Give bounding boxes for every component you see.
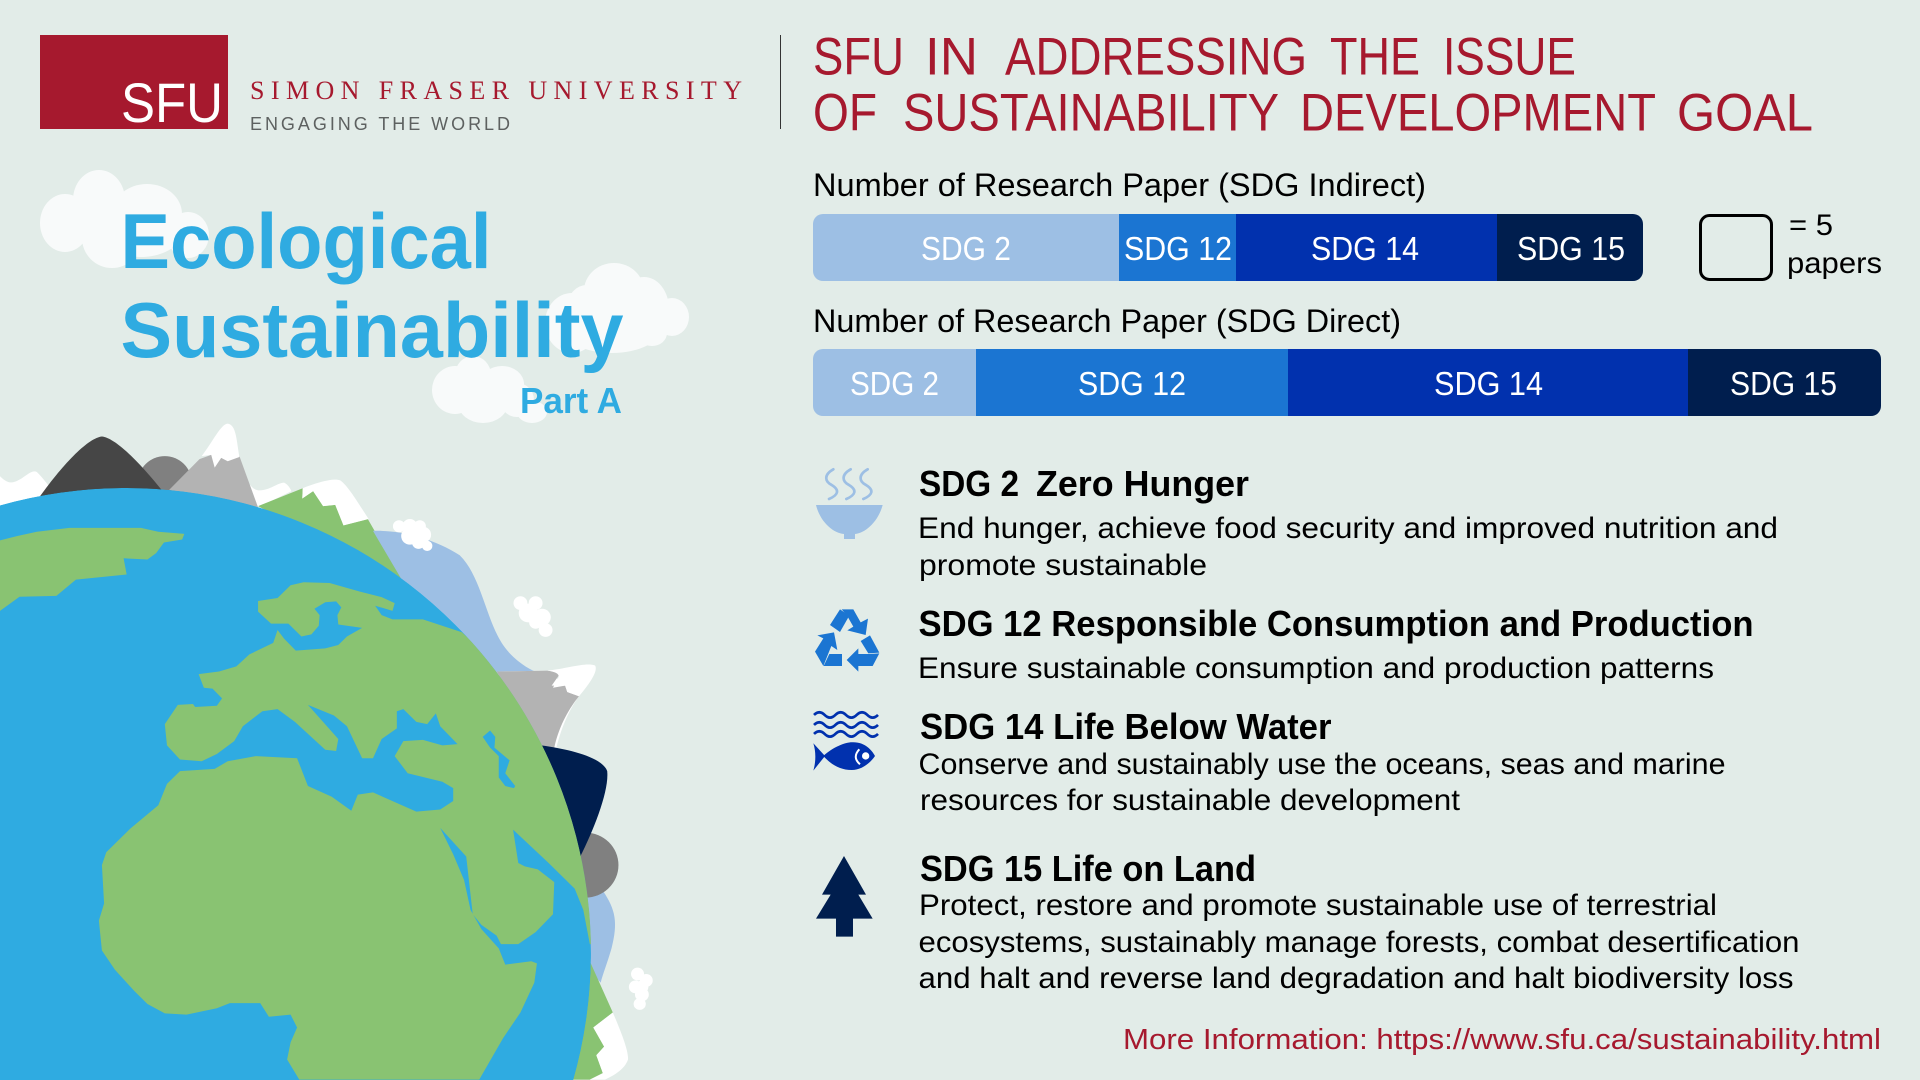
stacked bar: SDG direct: SDG 12 — [1078, 365, 1186, 402]
SDG 2 text: Zero Hunger — [1036, 463, 1249, 504]
heading: SFU in addressing the issue: SFU — [813, 28, 904, 86]
logo: SFU: SFU — [121, 71, 223, 134]
SDG 15 text: ecosystems, sustainably manage forests, combat desertification — [918, 926, 1800, 959]
heading: SFU in addressing the issue: THE — [1330, 28, 1420, 86]
footer: more information link: More Information: https://www.sfu.ca/sustainability.html — [1123, 1024, 1881, 1056]
logo: SFU — [40, 35, 742, 134]
decorative clouds behind title — [40, 170, 689, 423]
legend: box equals 5 papers: papers — [1787, 247, 1882, 280]
SDG 15 text — [918, 848, 1800, 995]
heading: SFU in addressing the issue: DEVELOPMENT — [1300, 84, 1656, 142]
heading: SFU in addressing the issue: ISSUE — [1443, 28, 1576, 86]
icon: recycling arrows — [815, 609, 879, 672]
stacked bar: SDG direct: SDG 14 — [1434, 365, 1543, 402]
heading: SFU in addressing the issue: OF — [813, 84, 877, 142]
heading: SFU in addressing the issue: IN — [925, 28, 978, 86]
stacked bar: SDG indirect: SDG 12 — [1124, 230, 1232, 267]
heading: SFU in addressing the issue: SUSTAINABILITY — [903, 84, 1279, 142]
SDG 2 text: promote sustainable — [919, 549, 1207, 582]
icon: pine tree — [816, 856, 873, 937]
illustration: earth globe — [0, 488, 607, 1080]
heading: SFU in addressing the issue: GOAL — [1677, 84, 1813, 142]
title: Ecological Sustainability Part A: Sustainability — [120, 286, 624, 374]
stacked bar: SDG direct: SDG 2 — [850, 365, 939, 402]
stacked bar: SDG direct: SDG 15 — [1730, 365, 1837, 402]
logo: SFU: ENGAGING THE WORLD — [250, 114, 510, 134]
chart label: SDG direct: Number of Research Paper (SDG Direct) — [813, 303, 1401, 339]
legend: box equals 5 papers — [1700, 209, 1882, 280]
SDG 2 text: End hunger, achieve food security and improved nutrition and — [918, 512, 1778, 545]
title: Ecological Sustainability Part A: Part A — [520, 380, 622, 421]
title: Ecological Sustainability Part A — [120, 197, 624, 421]
title: Ecological Sustainability Part A: Ecological — [120, 197, 492, 285]
heading: SFU in addressing the issue — [813, 28, 1813, 142]
stacked bar: SDG indirect: SDG 15 — [1517, 230, 1625, 267]
stacked bar: SDG indirect: SDG 14 — [1311, 230, 1419, 267]
SDG 12 text — [918, 603, 1754, 685]
SDG 2 text — [918, 463, 1778, 582]
SDG 2 text: SDG 2 — [919, 463, 1019, 504]
chart label: SDG indirect: Number of Research Paper (SDG Indirect) — [813, 167, 1426, 203]
SDG 12 text: SDG 12 Responsible Consumption and Production — [918, 603, 1754, 644]
icon: steaming bowl — [816, 469, 883, 539]
icon: fish below waves — [813, 712, 878, 771]
SDG 14 text: Conserve and sustainably use the oceans, seas and marine — [918, 748, 1726, 781]
heading: SFU in addressing the issue: ADDRESSING — [1005, 28, 1307, 86]
SDG 14 text — [918, 706, 1726, 817]
SDG 14 text: SDG 14 Life Below Water — [920, 706, 1332, 747]
stacked bar: SDG indirect: SDG 2 — [921, 230, 1011, 267]
stacked bar: SDG direct — [813, 349, 1881, 416]
illustration: mountains behind earth — [0, 424, 653, 1080]
SDG 14 text: resources for sustainable development — [920, 784, 1461, 817]
SDG 12 text: Ensure sustainable consumption and production patterns — [918, 652, 1714, 685]
legend: box equals 5 papers: = 5 — [1789, 209, 1833, 242]
SDG 15 text: SDG 15 Life on Land — [920, 848, 1256, 889]
stacked bar: SDG indirect — [813, 214, 1643, 281]
SDG 15 text: and halt and reverse land degradation and halt biodiversity loss — [918, 962, 1794, 995]
SDG 15 text: Protect, restore and promote sustainable use of terrestrial — [919, 889, 1717, 922]
logo: SFU: SIMON FRASER UNIVERSITY — [250, 76, 742, 105]
